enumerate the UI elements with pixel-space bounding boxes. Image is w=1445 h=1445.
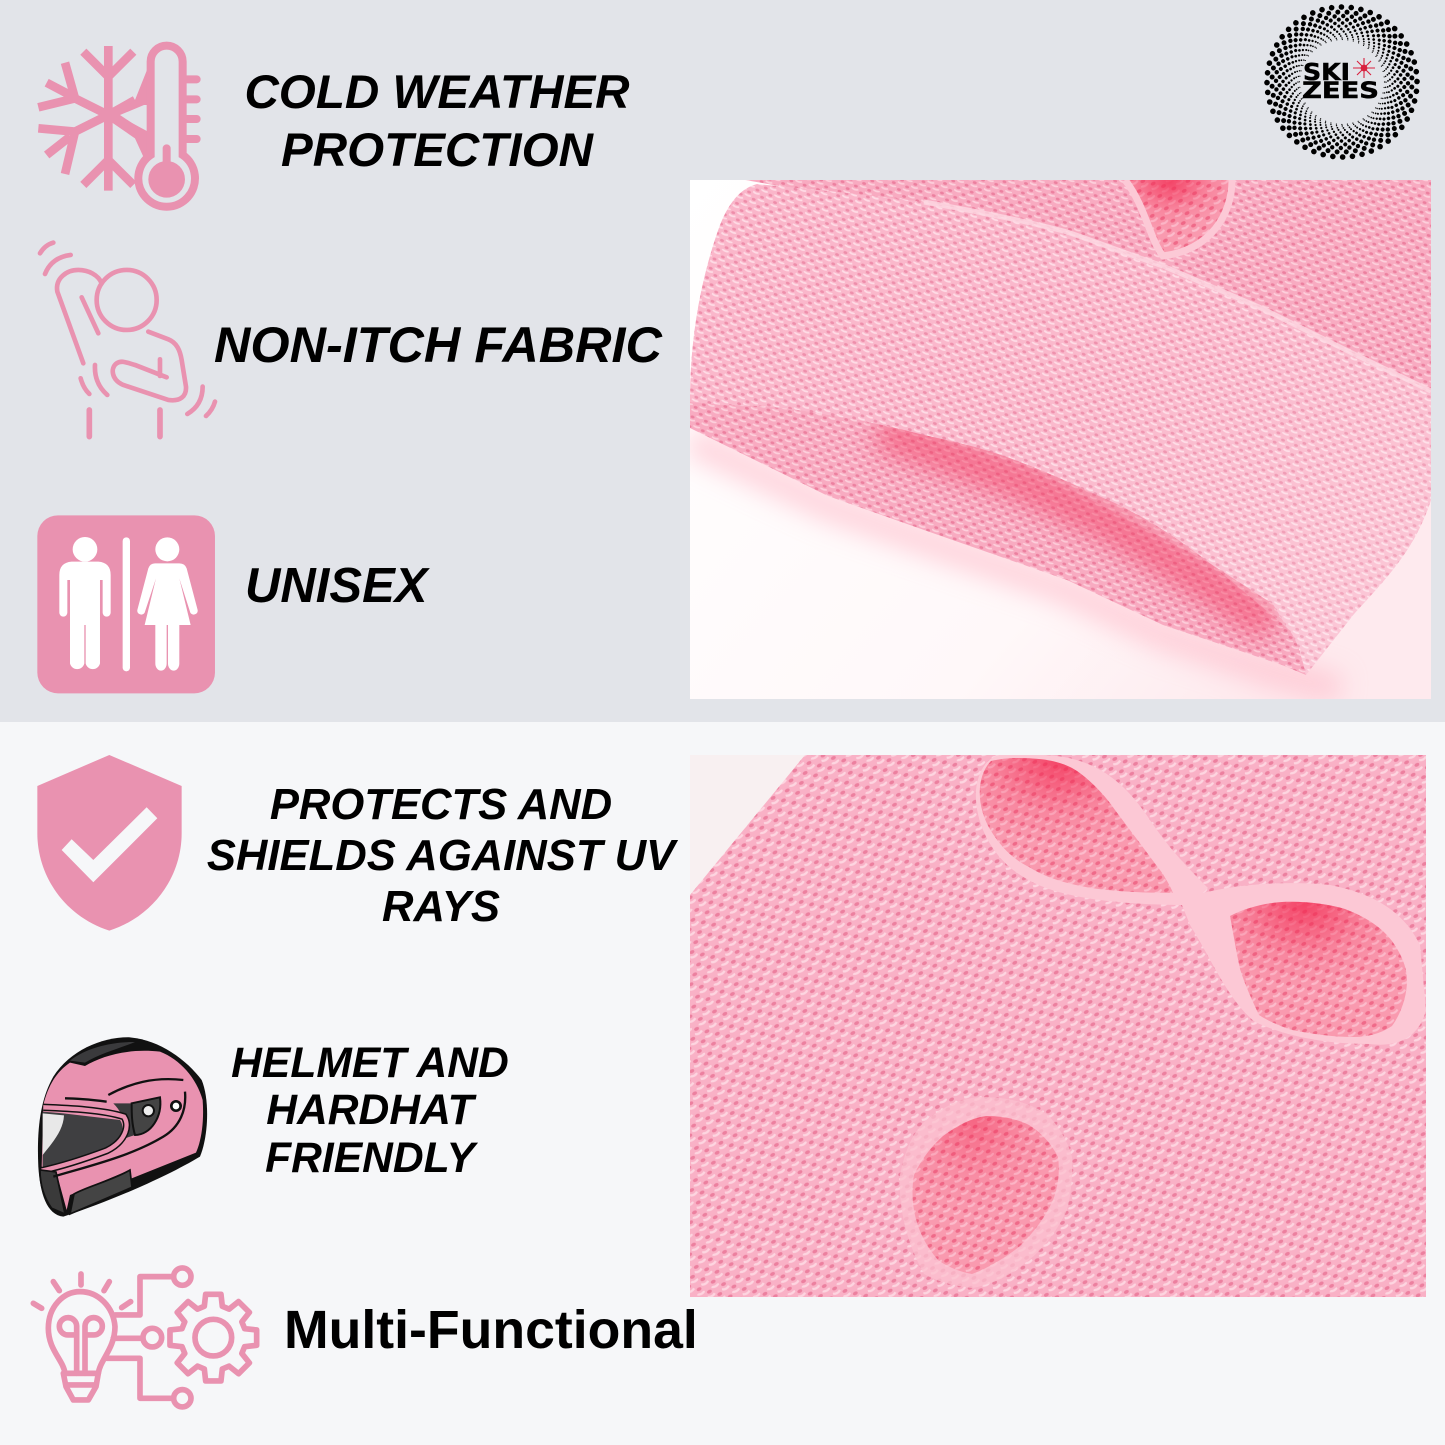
heading: helmet and hardhat friendly — [231, 1039, 509, 1182]
heading: protects and shields against UV rays: RAYS — [382, 883, 500, 931]
icon: light bulb circuit and gear — [33, 1268, 257, 1407]
heading: cold weather protection: COLD WEATHER — [244, 66, 630, 119]
heading: helmet and hardhat friendly: HELMET AND — [231, 1039, 509, 1087]
heading: cold weather protection — [244, 66, 630, 177]
icon: shield with check — [37, 755, 182, 931]
heading: helmet and hardhat friendly: FRIENDLY — [265, 1134, 478, 1182]
right eye opening — [1180, 883, 1426, 1045]
mouth opening — [900, 1097, 1072, 1288]
panel: top grey section — [0, 0, 1445, 722]
heading: protects and shields against UV rays: PROTECTS AND — [270, 781, 612, 829]
heading: protects and shields against UV rays: SHIELDS AGAINST UV — [207, 832, 679, 880]
photo: folded knit cuff — [690, 180, 1431, 699]
heading: unisex: UNISEX — [245, 559, 431, 613]
logo: Ski Zees dotted swirl: SKI — [1303, 60, 1350, 86]
icon: unisex restroom sign — [37, 515, 215, 693]
logo: Ski Zees dotted swirl — [1237, 0, 1445, 187]
logo: Ski Zees dotted swirl: ZEES — [1302, 79, 1379, 104]
heading: cold weather protection: PROTECTION — [281, 124, 595, 177]
icon: pink motorcycle helmet — [38, 1037, 207, 1217]
heading: helmet and hardhat friendly: HARDHAT — [266, 1086, 478, 1134]
panel: bottom light section — [0, 722, 1445, 1445]
heading: non-itch fabric: NON-ITCH FABRIC — [214, 316, 662, 373]
left eye opening — [976, 755, 1208, 905]
photo: balaclava eye and mouth openings — [690, 755, 1426, 1297]
icon: snowflake and thermometer — [38, 46, 197, 207]
heading: protects and shields against UV rays — [207, 781, 679, 931]
heading: multi-functional: Multi-Functional — [284, 1300, 698, 1360]
icon: itching person — [40, 243, 215, 437]
